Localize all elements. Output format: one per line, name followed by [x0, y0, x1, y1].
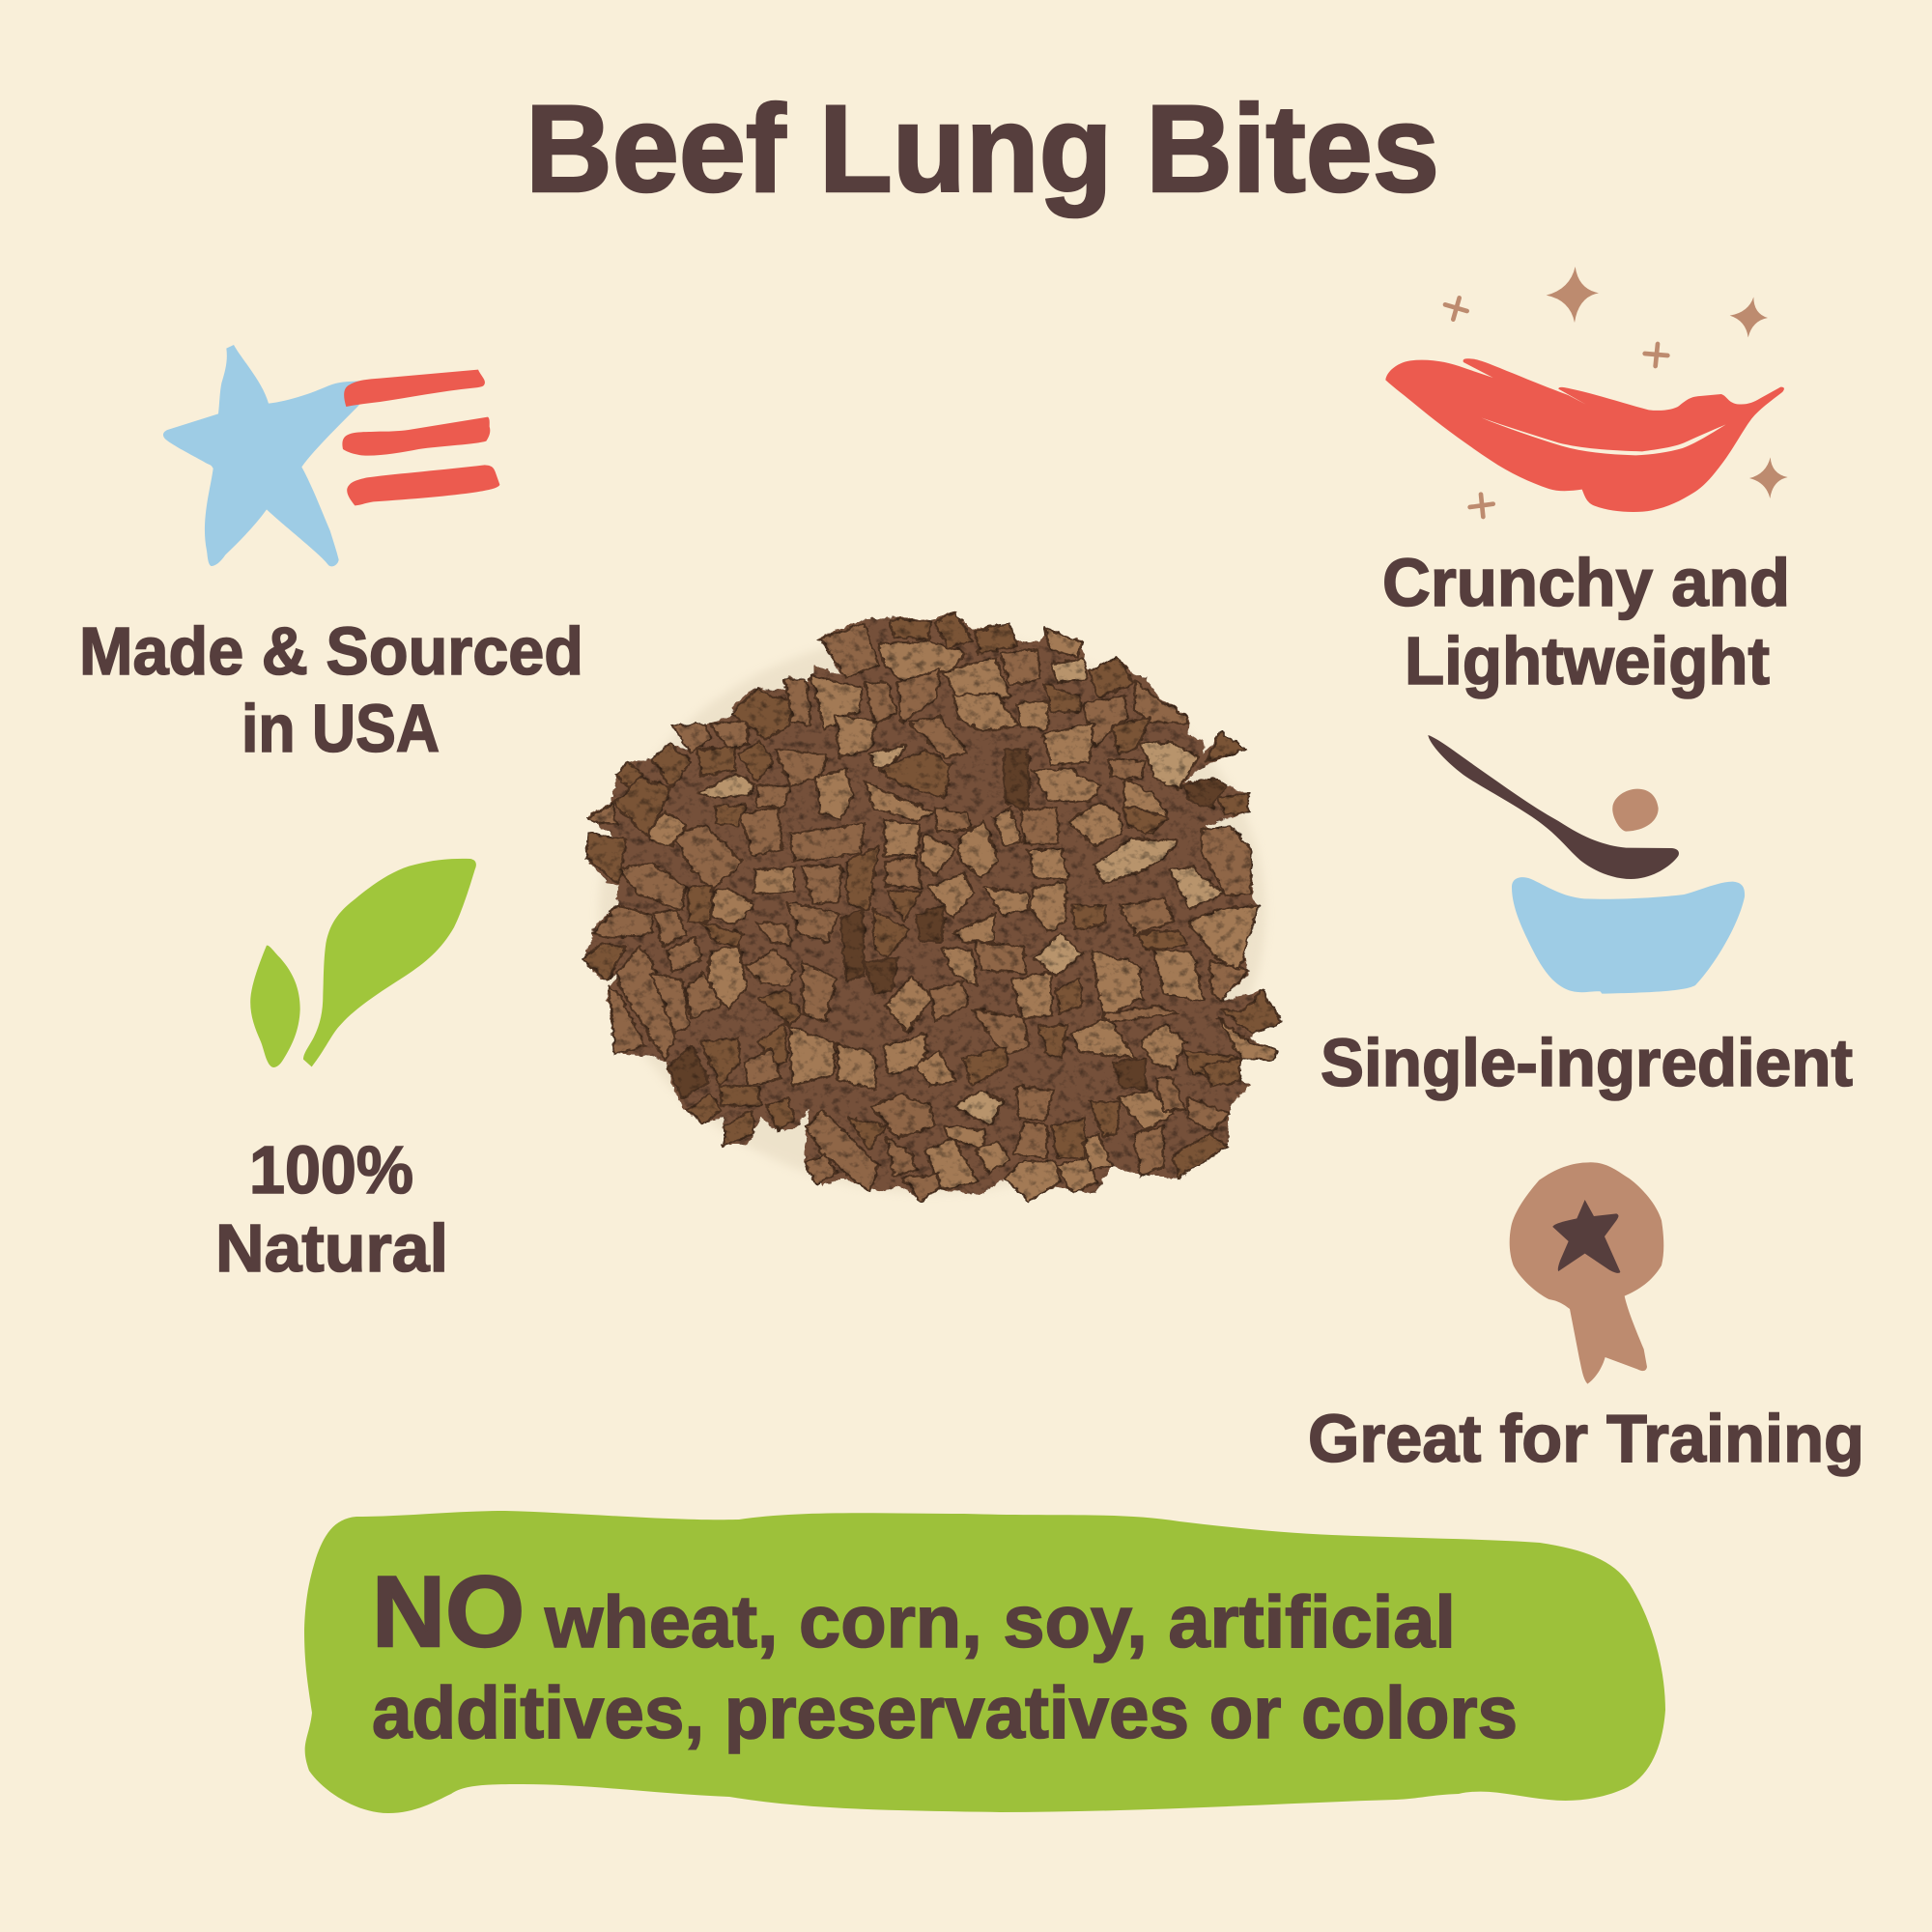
label: 100% natural: 100% — [249, 1132, 413, 1208]
banner text: wheat, corn, soy, artificial — [544, 1581, 1456, 1663]
icon: star with stripes — [163, 345, 499, 566]
label: 100% natural: Natural — [215, 1210, 448, 1286]
label: made and sourced: Made & Sourced — [79, 613, 583, 689]
banner text: NO — [372, 1556, 525, 1668]
title: Beef Lung Bites — [526, 80, 1439, 218]
icon: feather with sparkles — [1385, 267, 1788, 517]
label: made and sourced — [79, 613, 583, 766]
callout: no additives banner — [304, 1511, 1665, 1813]
icon: spoon and bowl — [1428, 735, 1745, 994]
icon: award ribbon — [1510, 1162, 1663, 1384]
banner text — [372, 1556, 1518, 1754]
label: made and sourced: in USA — [242, 691, 440, 766]
label: crunchy and lightweight: Lightweight — [1405, 623, 1770, 698]
label: single-ingredient: Single-ingredient — [1321, 1025, 1853, 1100]
photo: pile of beef lung bites — [582, 611, 1281, 1202]
label: crunchy and lightweight — [1382, 545, 1790, 698]
banner text: additives, preservatives or colors — [372, 1672, 1518, 1754]
label: great for training: Great for Training — [1308, 1401, 1864, 1476]
label: 100% natural — [215, 1132, 448, 1286]
icon: leaves — [250, 859, 476, 1067]
label: crunchy and lightweight: Crunchy and — [1382, 545, 1790, 620]
